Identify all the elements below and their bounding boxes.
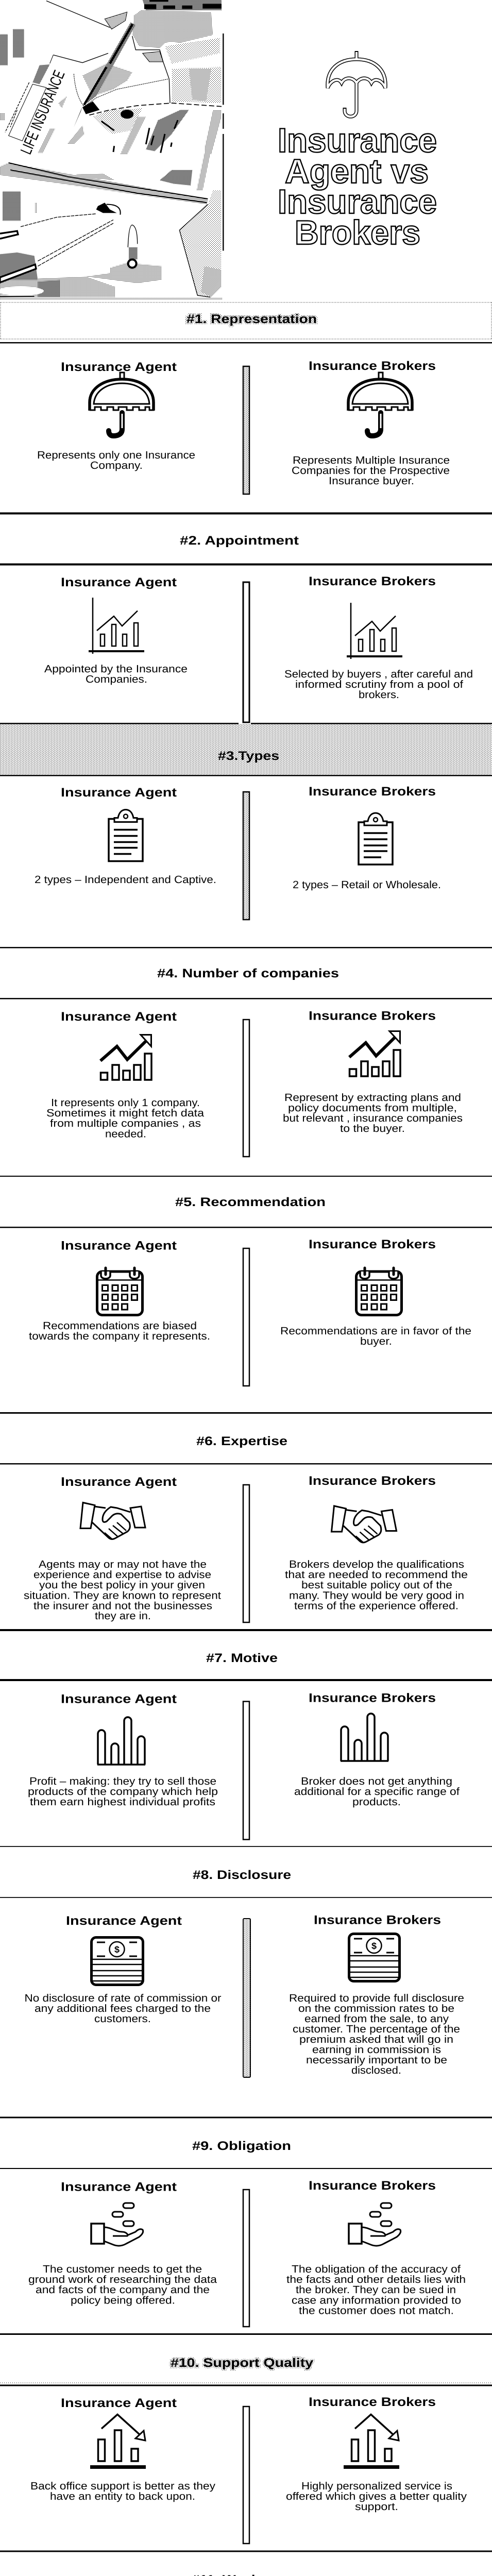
icon: clipboard [359,813,393,865]
description: that are needed to recommend the [285,1569,468,1581]
description: best suitable policy out of the [301,1579,452,1591]
description [25,1992,222,2025]
description: ground work of researching the data [28,2274,217,2285]
description: policy being offered. [71,2295,175,2306]
column heading: Insurance Brokers [309,1009,436,1023]
description: the facts and other details lies with [286,2274,466,2285]
description [285,1558,468,1612]
description [284,668,473,701]
description: offered which gives a better quality [286,2490,467,2502]
description: to the buyer. [340,1123,405,1134]
description: Selected by buyers , after careful and [284,668,473,680]
description: Insurance buyer. [329,475,414,487]
description: Represents only one Insurance [37,449,195,461]
description: many. They would be very good in [289,1590,464,1601]
column: brokers [285,1474,468,1612]
heading: 8 Disclosure: #8. Disclosure [193,1868,291,1882]
heading: 7 Motive: #7. Motive [206,1651,278,1665]
description: experience and expertise to advise [33,1569,211,1581]
description: support. [355,2501,398,2513]
divider [243,1701,249,1839]
description: Sometimes it might fetch data [46,1107,205,1119]
column heading: Insurance Agent [61,786,177,800]
icon: title umbrella [328,51,385,116]
icon: banknotes: $ [114,1944,120,1955]
description: situation. They are known to represent [24,1590,221,1601]
divider [243,1919,250,2077]
divider [243,792,249,920]
description: earned from the sale, to any [304,2013,449,2025]
title: Agent vs [285,152,429,190]
icon: banknotes [349,1934,400,1981]
description [30,2480,216,2502]
icon: clipboard [109,810,143,861]
column: agent [30,2396,216,2502]
description: No disclosure of rate of commission or [25,1992,222,2004]
panel: 1 Representation [0,302,492,494]
column: agent [28,2180,217,2306]
title: Insurance [278,182,437,221]
description: Highly personalized service is [301,2480,452,2492]
column heading: Insurance Brokers [309,2395,436,2409]
heading: 10 Support Quality: #10. Support Quality [171,2356,314,2370]
photo: hand signing life insurance form [0,0,223,300]
column heading: Insurance Agent [61,1692,177,1706]
description: The obligation of the accuracy of [292,2263,461,2275]
column heading: Insurance Agent [61,2180,177,2194]
column: brokers [286,2395,467,2513]
description: Required to provide full disclosure [289,1992,464,2004]
column: brokers [284,574,473,701]
description: additional for a specific range of [294,1786,460,1798]
icon: handshake [80,1502,145,1539]
description: disclosed. [351,2064,401,2076]
description: customers. [94,2013,151,2025]
description: Brokers develop the qualifications [289,1558,464,1570]
divider [243,1485,249,1622]
description: terms of the experience offered. [294,1600,459,1612]
description [280,1325,471,1347]
column: brokers [289,1913,464,2076]
description: Represents Multiple Insurance [293,454,450,466]
description: and facts of the company and the [36,2284,210,2296]
icon: declining chart [344,2414,399,2469]
description: buyer. [360,1335,392,1347]
column: agent [46,1010,205,1140]
column heading: Insurance Agent [61,360,177,374]
title [278,121,437,251]
description [28,1775,218,1808]
panel: 5 Recommendation [0,1176,492,1386]
column: brokers [294,1691,460,1808]
column: brokers [283,1009,463,1134]
description: premium asked that will go in [299,2033,453,2045]
column: agent [44,575,188,685]
description: Back office support is better as they [30,2480,216,2492]
description: policy documents from multiple, [288,1102,457,1114]
description: Recommendations are in favor of the [280,1325,471,1337]
column heading: Insurance Brokers [314,1913,441,1927]
heading: 4 Number of companies: #4. Number of companies [157,967,339,980]
icon: chart [347,603,402,659]
column heading: Insurance Agent [61,1475,177,1489]
description [28,2263,217,2306]
panel: 10 Support Quality [0,2333,492,2544]
divider [243,582,249,722]
icon: growth chart [100,1035,151,1080]
icon: banknotes: $ [371,1941,377,1951]
heading: 9 Obligation: #9. Obligation [192,2139,291,2153]
column heading: Insurance Brokers [309,2179,436,2193]
heading: 1 Representation: #1. Representation [186,312,317,326]
heading: 6 Expertise: #6. Expertise [196,1434,287,1448]
column heading: Insurance Brokers [309,359,436,373]
panel: 7 Motive [0,1629,492,1839]
description [37,449,195,471]
column heading: Insurance Agent [61,2396,177,2410]
description: brokers. [359,689,399,701]
description: products. [352,1796,401,1808]
description: Profit – making: they try to sell those [29,1775,216,1787]
column: agent [37,360,195,471]
column heading: Insurance Agent [66,1914,182,1928]
description [286,2480,467,2513]
panel: 3 Types [0,723,492,920]
icon: declining chart [90,2414,146,2469]
column heading: Insurance Agent [61,1239,177,1253]
panel: 11 Weakness [0,2550,492,2576]
description: Companies for the Prospective [292,465,450,477]
description: It represents only 1 company. [51,1097,200,1109]
column heading: Insurance Agent [61,1010,177,1024]
description: any additional fees charged to the [35,2003,211,2014]
column: agent [24,1475,221,1622]
description [292,454,450,487]
icon: banknotes [92,1937,143,1985]
description [283,1092,463,1134]
description: informed scrutiny from a pool of [295,679,463,690]
description [286,2263,466,2316]
description: Companies. [86,673,147,685]
description: the broker. They can be sued in [296,2284,456,2296]
description: Agents may or may not have the [39,1558,207,1570]
heading: 3 Types: #3.Types [218,749,279,763]
description: customer. The percentage of the [293,2023,460,2035]
description: have an entity to back upon. [50,2490,195,2502]
description: case any information provided to [292,2295,461,2306]
description: towards the company it represents. [29,1330,210,1342]
description: from multiple companies , as [50,1117,201,1129]
icon: umbrella [348,372,413,436]
column: agent [25,1914,222,2025]
panel: 4 Number of companies [0,947,492,1157]
column: agent [28,1692,218,1808]
photo: hand signing life insurance form: LIFE INSURANCE [17,67,68,157]
panel: 9 Obligation [0,2116,492,2327]
description: them earn highest individual profits [30,1796,215,1808]
description [29,1320,210,1342]
divider [243,2190,249,2327]
divider [243,1248,249,1386]
description: Company. [90,460,143,471]
icon: hand with coins [349,2203,401,2246]
column heading: Insurance Agent [61,575,177,589]
description: they are in. [95,1610,151,1622]
divider [243,2406,249,2544]
divider [243,1020,249,1157]
description: the customer does not match. [299,2305,454,2316]
description: earning in commission is [312,2044,441,2056]
column: brokers [293,785,441,891]
column heading: Insurance Brokers [309,785,436,799]
icon: handshake [332,1506,397,1543]
icon: chart [89,598,144,654]
icon: umbrella [90,372,154,436]
icon: growth chart [349,1031,400,1076]
title: Brokers [295,213,420,251]
column heading: Insurance Brokers [309,1474,436,1488]
description: 2 types – Retail or Wholesale. [293,879,441,891]
description [289,1992,464,2076]
panel: 8 Disclosure [0,1846,492,2077]
description: products of the company which help [28,1786,218,1798]
icon: hand with coins [91,2203,143,2246]
description: Appointed by the Insurance [44,663,188,675]
column: brokers [292,359,450,487]
description: but relevant , insurance companies [283,1112,463,1124]
description: Represent by extracting plans and [284,1092,461,1104]
description [46,1097,205,1140]
panel: 2 Appointment [0,512,492,722]
description: you the best policy in your given [39,1579,205,1591]
description: Recommendations are biased [43,1320,197,1332]
divider [243,366,249,494]
column heading: Insurance Brokers [309,574,436,588]
column: brokers [280,1238,471,1347]
description: on the commission rates to be [298,2003,454,2014]
description: The customer needs to get the [43,2263,202,2275]
icon: calendar [357,1268,402,1315]
column: agent [35,786,216,886]
column: brokers [286,2179,466,2316]
column: agent [29,1239,210,1342]
title: Insurance [278,121,437,159]
description [44,663,188,685]
description: 2 types – Independent and Captive. [35,874,216,886]
description: Broker does not get anything [301,1775,452,1787]
description: needed. [105,1128,146,1140]
column heading: Insurance Brokers [309,1691,436,1705]
heading: 5 Recommendation: #5. Recommendation [175,1195,326,1209]
panel: 6 Expertise [0,1412,492,1622]
description [24,1558,221,1622]
description: the insurer and not the businesses [33,1600,212,1612]
heading: 2 Appointment: #2. Appointment [180,534,299,548]
icon: calendar [97,1268,142,1315]
description: necessarily important to be [306,2054,447,2066]
description [294,1775,460,1808]
icon: bar chart [97,1717,145,1765]
icon: bar chart [341,1714,388,1761]
column heading: Insurance Brokers [309,1238,436,1251]
